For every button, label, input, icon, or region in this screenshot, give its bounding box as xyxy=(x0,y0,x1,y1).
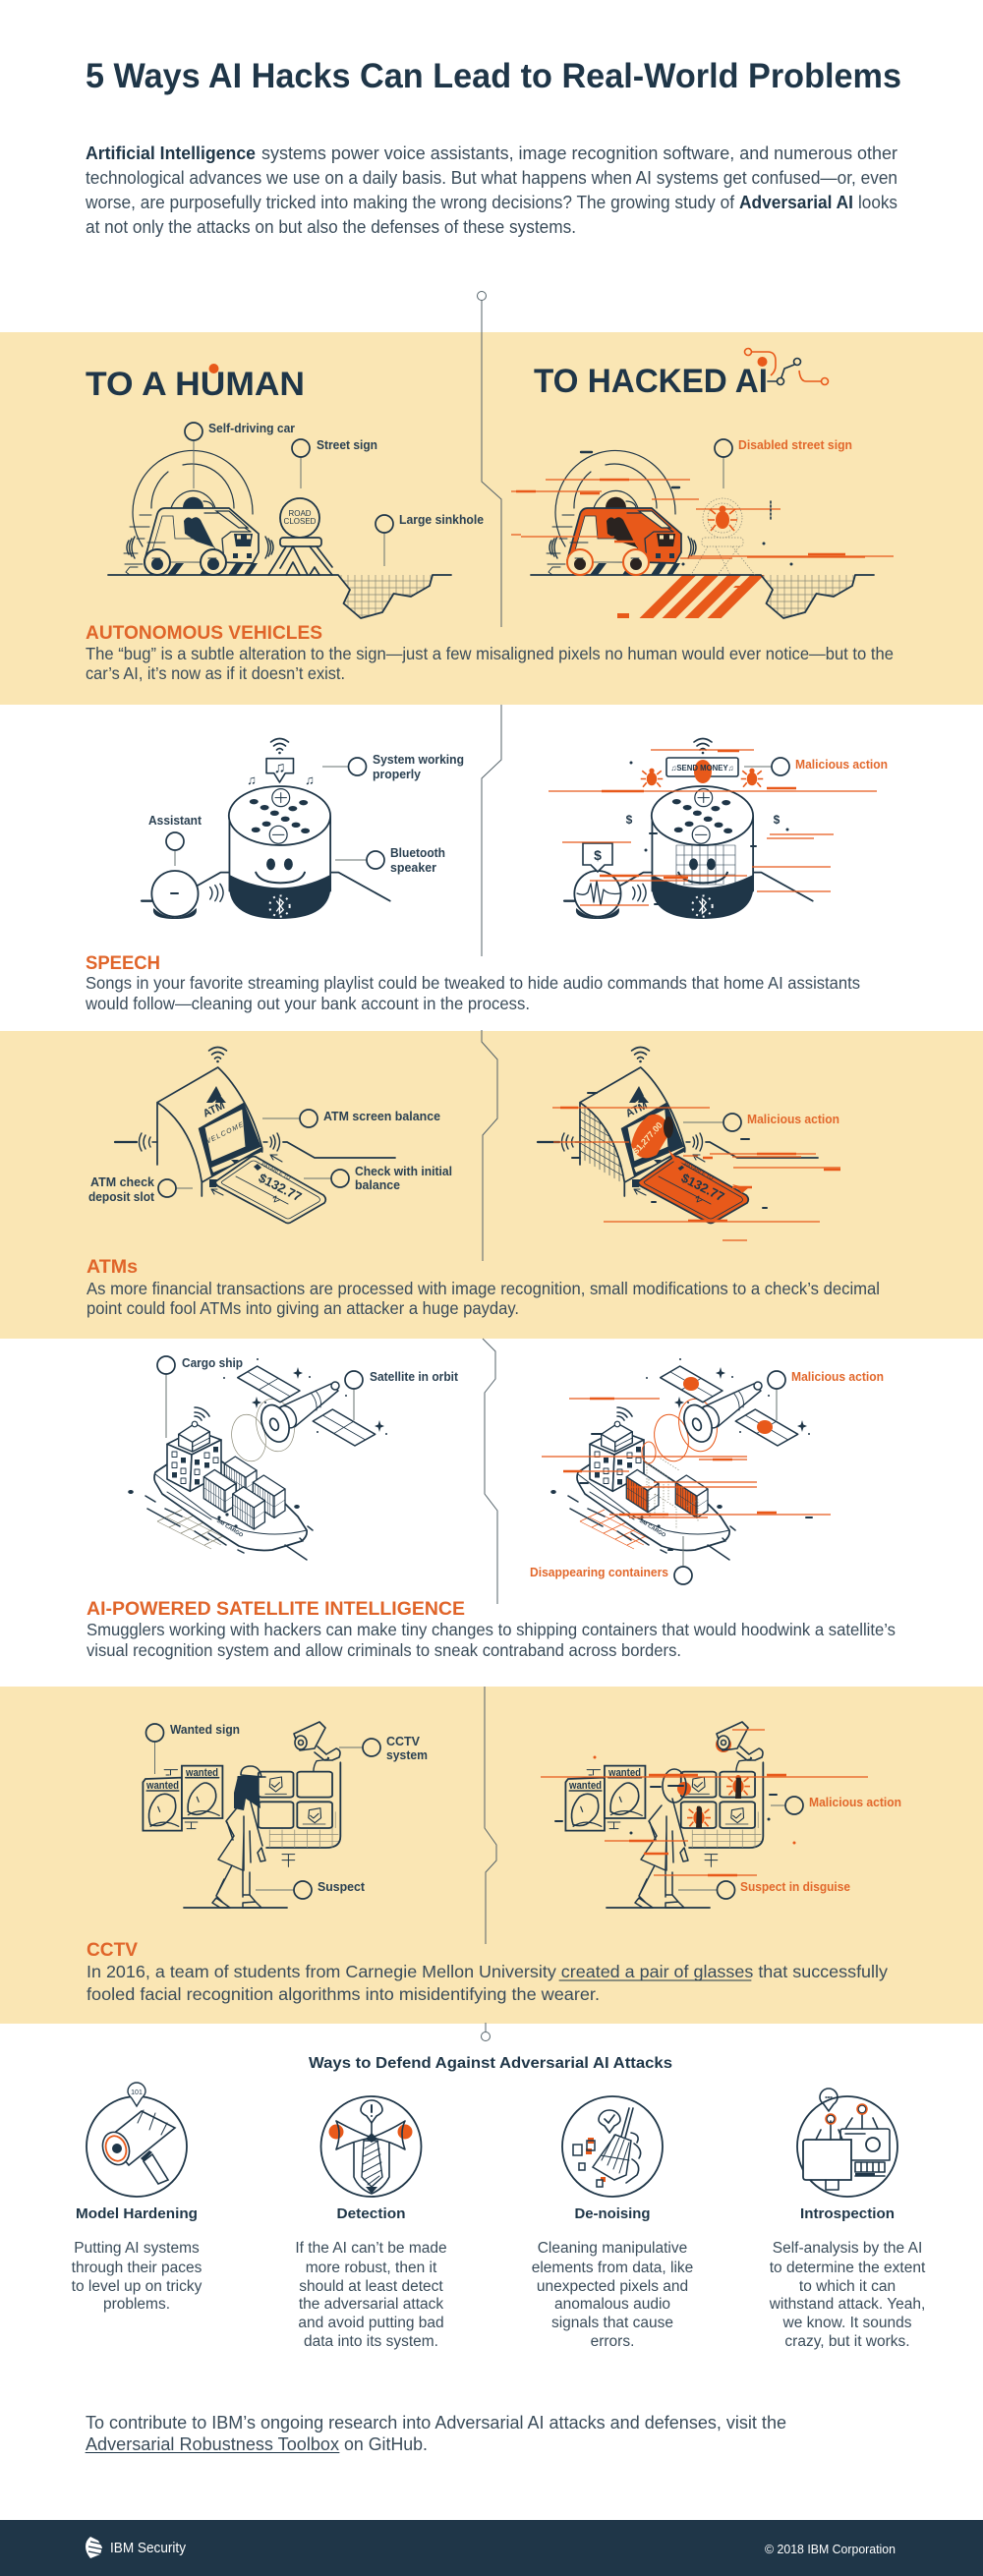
panel text: speech: SPEECH xyxy=(86,953,160,974)
text: withstand attack. Yeah, xyxy=(769,2296,925,2313)
panel text: autonomous vehicles xyxy=(86,623,894,683)
label: ATM check deposit slot xyxy=(88,1174,193,1204)
footer bar: © 2018 IBM Corporation xyxy=(765,2542,896,2556)
illustration: ATM, human view xyxy=(115,1048,395,1223)
closing call to action: on GitHub. xyxy=(344,2434,428,2454)
send money box xyxy=(666,758,738,783)
intro paragraph xyxy=(85,143,897,237)
road closed sign: ROAD xyxy=(288,509,312,518)
text: unexpected pixels and xyxy=(537,2278,688,2295)
footer bar xyxy=(0,2520,983,2576)
panel text: CCTV: CCTV xyxy=(87,1940,138,1961)
illustration: ATM, hacked view: PAYABLE TO xyxy=(682,1162,715,1182)
icon: CCTV camera xyxy=(294,1722,340,1760)
closing call to action: Adversarial Robustness Toolbox xyxy=(86,2434,339,2454)
illustration: cargo ship and satellite, hacked view xyxy=(542,1358,831,1560)
hacked orbits xyxy=(650,1411,693,1464)
text: Putting AI systems xyxy=(74,2240,200,2257)
label: bluetooth speaker: speaker xyxy=(390,860,436,875)
panel text: autonomous vehicles: car’s AI, it’s now as if it doesn’t exist. xyxy=(86,663,345,683)
label: wanted sign: Wanted sign xyxy=(170,1722,240,1737)
illustration: smart speaker, human view: ♫ xyxy=(305,773,315,787)
illustration: self-driving car, hacked view xyxy=(511,450,894,619)
label: suspect in disguise xyxy=(678,1879,850,1899)
bugged monitors xyxy=(726,1775,750,1795)
label: assistant xyxy=(148,813,202,866)
center dividing line xyxy=(478,291,501,2040)
icon: broom xyxy=(562,2096,663,2197)
illustration: CCTV, human view: wanted xyxy=(185,1767,218,1779)
panel text: speech: would follow—cleaning out your bank account in the process. xyxy=(85,994,530,1013)
illustration: ATM, hacked view: $132.77 xyxy=(679,1171,726,1204)
label: CCTV system: system xyxy=(386,1747,428,1762)
illustration: cargo ship and satellite, human view xyxy=(128,1358,387,1560)
panel text: ATMs: As more financial transactions are processed with image recognition, small modifications to a check’s decimal xyxy=(87,1279,880,1298)
intro paragraph: technological advances we use on a daily basis. But what happens when AI systems get confused—or, even xyxy=(86,168,897,188)
water grid xyxy=(157,1510,231,1549)
label: check with initial balance: balance xyxy=(355,1177,400,1192)
panel text: ATMs: ATMs xyxy=(87,1257,138,1278)
hacked panels marks xyxy=(683,1377,773,1434)
defense: introspection: Introspection xyxy=(800,2205,895,2222)
illustration: smart speaker, human view xyxy=(142,739,390,919)
label: malicious action (CCTV): Malicious action xyxy=(809,1795,901,1809)
icon: bug xyxy=(708,505,737,531)
label: CCTV system xyxy=(339,1734,428,1762)
illustration: cargo ship and satellite, hacked view: SM CARGO xyxy=(638,1518,667,1539)
panel text: CCTV xyxy=(87,1940,888,2004)
illustration: ATM, hacked view: ATM xyxy=(624,1100,650,1120)
text: through their paces xyxy=(72,2260,202,2276)
label: system working properly: properly xyxy=(373,767,422,781)
text: and avoid putting bad xyxy=(298,2315,444,2331)
label: cargo ship xyxy=(157,1355,243,1438)
text: crazy, but it works. xyxy=(784,2333,910,2350)
icon: robot xyxy=(797,2089,897,2197)
speaker face grid xyxy=(676,845,735,885)
panel text: ATMs xyxy=(87,1257,880,1318)
person in disguise xyxy=(677,1782,691,1796)
text: should at least detect xyxy=(299,2278,443,2295)
icon: IBM Security logo xyxy=(86,2537,103,2558)
label: large sinkhole: Large sinkhole xyxy=(399,512,484,527)
hacked water grid xyxy=(580,1510,654,1549)
illustration: ATM, hacked view xyxy=(538,1048,840,1240)
illustration: smart speaker, hacked view: $ xyxy=(774,813,781,827)
text: signals that cause xyxy=(551,2315,673,2331)
text: problems. xyxy=(103,2296,170,2313)
label: wanted sign xyxy=(145,1722,240,1774)
illustration: ATM, human view: WELCOME xyxy=(203,1121,246,1147)
ship name: SM CARGO xyxy=(215,1518,245,1539)
label: ATM check deposit slot: deposit slot xyxy=(88,1189,155,1204)
icons: music notes: ♫ xyxy=(273,760,285,776)
intro paragraph: systems power voice assistants, image recognition software, and numerous other xyxy=(261,143,897,163)
glitch lines xyxy=(541,1730,868,1875)
panel text: speech xyxy=(85,953,860,1013)
remaining containers xyxy=(626,1469,708,1517)
panel text: autonomous vehicles: The “bug” is a subtle alteration to the sign—just a few misaligned pixels no human would ever notice—but to the xyxy=(86,644,894,663)
panel text: satellite intelligence xyxy=(87,1599,896,1660)
illustration: ATM, human view: $132.77 xyxy=(257,1171,304,1204)
heading: to hacked AI: TO HACKED AI xyxy=(534,363,768,400)
text: the adversarial attack xyxy=(299,2296,443,2313)
defense: de-noising xyxy=(532,2096,693,2350)
label: cargo ship: Cargo ship xyxy=(182,1355,243,1370)
label: system working properly: System working xyxy=(373,752,464,767)
label: malicious action (speech): Malicious action xyxy=(795,757,888,772)
label: malicious action (satellite) xyxy=(768,1369,884,1420)
icon: wifi xyxy=(694,739,712,754)
ghost containers xyxy=(647,1457,698,1529)
text xyxy=(532,2240,693,2350)
panel text: speech: Songs in your favorite streaming playlist could be tweaked to hide audio commands that home AI assistants xyxy=(86,973,860,993)
assistant waveform xyxy=(577,881,620,905)
intro paragraph: at not only the attacks on but also the defenses of these systems. xyxy=(86,217,576,237)
dollar bubble: $ xyxy=(594,847,602,863)
icon: circuit traces xyxy=(745,348,828,385)
text: errors. xyxy=(591,2333,634,2350)
label: disappearing containers xyxy=(530,1536,692,1584)
illustration: smart speaker, human view: ♫ xyxy=(247,773,257,787)
panel text: CCTV: In 2016, a team of students from Carnegie Mellon University created a pair of glasses that successfully xyxy=(87,1962,888,1981)
icon: wifi xyxy=(271,739,289,754)
label: disabled street sign xyxy=(715,437,852,488)
text: elements from data, like xyxy=(532,2260,693,2276)
illustration: smart speaker, hacked view xyxy=(549,739,877,919)
label: street sign xyxy=(292,437,377,488)
intro paragraph: looks xyxy=(858,193,897,212)
illustration: smart speaker, hacked view: $ xyxy=(626,813,633,827)
illustration: self-driving car, human view xyxy=(108,450,451,619)
containers xyxy=(224,1457,257,1499)
label: bluetooth speaker: Bluetooth xyxy=(390,845,445,860)
panel text: CCTV: fooled facial recognition algorithms into misidentifying the wearer. xyxy=(87,1984,600,2004)
defense: de-noising: De-noising xyxy=(574,2205,651,2222)
label: disappearing containers: Disappearing containers xyxy=(530,1565,668,1579)
label: satellite in orbit: Satellite in orbit xyxy=(370,1369,459,1384)
text xyxy=(72,2240,202,2313)
hacked screen blob xyxy=(631,1115,671,1158)
send money box: ♫SEND MONEY♫ xyxy=(670,764,733,773)
label: bluetooth speaker xyxy=(335,845,445,875)
defense: model hardening: Model Hardening xyxy=(76,2205,198,2222)
label: check with initial balance xyxy=(304,1164,452,1192)
text: to determine the extent xyxy=(770,2260,926,2276)
label: assistant: Assistant xyxy=(148,813,202,828)
person xyxy=(184,1766,287,1908)
panel text: satellite intelligence: Smugglers working with hackers can make tiny changes to shipping containers that would hoodwink a satellite’s xyxy=(87,1620,896,1639)
intro paragraph: worse, are purposefully tricked into making the wrong decisions? The growing study of xyxy=(85,193,735,212)
panel text: satellite intelligence: visual recognition system and allow criminals to sneak contraband across borders. xyxy=(87,1640,681,1660)
text: we know. It sounds xyxy=(782,2315,912,2331)
label: ATM screen balance: ATM screen balance xyxy=(323,1109,440,1123)
icon: roller xyxy=(87,2083,187,2197)
label: malicious action (ATM): Malicious action xyxy=(747,1112,839,1126)
text: anomalous audio xyxy=(554,2296,670,2313)
hacked ground stripes xyxy=(617,575,765,618)
label: malicious action (ATM) xyxy=(683,1112,839,1131)
glitch lines xyxy=(542,1399,831,1517)
text: more robust, then it xyxy=(306,2260,437,2276)
closing call to action: To contribute to IBM’s ongoing research into Adversarial AI attacks and defenses, visit the xyxy=(86,2413,786,2433)
icon: wifi xyxy=(208,1048,226,1062)
illustration: CCTV, hacked view: wanted xyxy=(607,1767,641,1779)
intro paragraph: Artificial Intelligence xyxy=(86,143,256,163)
cream band backgrounds xyxy=(0,332,983,2024)
text: Cleaning manipulative xyxy=(538,2240,687,2257)
icon: roller: 101 xyxy=(131,2089,143,2096)
heading: to hacked AI xyxy=(534,348,828,400)
text: to level up on tricky xyxy=(72,2278,202,2295)
illustration: ATM, human view: PAYABLE TO xyxy=(260,1162,292,1182)
text: Self-analysis by the AI xyxy=(773,2240,922,2257)
label: large sinkhole xyxy=(376,512,484,566)
label: self-driving car xyxy=(185,421,295,488)
bugs xyxy=(641,769,663,787)
label: suspect xyxy=(256,1879,366,1899)
panel text: ATMs: point could fool ATMs into giving an attacker a huge payday. xyxy=(87,1298,519,1318)
glitch lines xyxy=(552,1108,840,1240)
heading: to a human: TO A HUMAN xyxy=(86,366,305,403)
defense: detection: Detection xyxy=(336,2205,405,2222)
label: system working properly xyxy=(322,752,464,781)
defense: model hardening xyxy=(72,2083,202,2313)
label: suspect: Suspect xyxy=(318,1879,366,1894)
road closed sign: CLOSED xyxy=(284,517,317,526)
intro paragraph: Adversarial AI xyxy=(739,193,853,212)
footer bar: IBM Security xyxy=(110,2540,186,2556)
closing call to action xyxy=(86,2413,786,2454)
illustration: CCTV, hacked view: wanted xyxy=(568,1780,602,1792)
text xyxy=(295,2240,447,2350)
text: data into its system. xyxy=(304,2333,438,2350)
label: disabled street sign: Disabled street sign xyxy=(738,437,852,452)
label: CCTV system: CCTV xyxy=(386,1734,420,1748)
label: suspect in disguise: Suspect in disguise xyxy=(740,1879,850,1894)
icon: wifi xyxy=(631,1048,649,1062)
label: satellite in orbit xyxy=(345,1369,459,1420)
illustration: ATM, hacked view: $1,277.00 xyxy=(631,1120,665,1156)
glitch lines xyxy=(549,750,877,905)
title: 5 Ways AI Hacks Can Lead to Real-World Problems xyxy=(86,57,901,95)
panel text: autonomous vehicles: AUTONOMOUS VEHICLES xyxy=(86,623,322,644)
panel text: satellite intelligence: AI-POWERED SATELLITE INTELLIGENCE xyxy=(87,1599,465,1620)
illustration: CCTV, human view xyxy=(143,1722,340,1908)
illustration: ATM, human view: ATM xyxy=(202,1100,227,1120)
text: to which it can xyxy=(799,2278,896,2295)
wanted poster text: wanted xyxy=(145,1780,179,1792)
label: street sign: Street sign xyxy=(317,437,377,452)
defense: introspection xyxy=(769,2089,926,2350)
glitch lines xyxy=(511,480,894,558)
label: ATM check deposit slot: ATM check xyxy=(90,1174,155,1189)
icon: megaphones xyxy=(320,2096,421,2197)
label: malicious action (speech) xyxy=(744,757,888,775)
label: malicious action (CCTV) xyxy=(771,1795,901,1814)
label: ATM screen balance xyxy=(262,1109,440,1127)
label: malicious action (satellite): Malicious action xyxy=(791,1369,884,1384)
label: check with initial balance: Check with initial xyxy=(355,1164,452,1178)
glitched road sign xyxy=(691,498,755,575)
text xyxy=(769,2240,926,2350)
grid on hacked ATM side xyxy=(580,1107,623,1181)
icon: hacked CCTV camera xyxy=(716,1722,763,1760)
orbits xyxy=(227,1411,270,1464)
defense: detection xyxy=(295,2096,447,2350)
heading: defenses: Ways to Defend Against Adversarial AI Attacks xyxy=(309,2055,672,2072)
text: If the AI can’t be made xyxy=(295,2240,447,2257)
illustration: CCTV, hacked view xyxy=(541,1722,868,1908)
label: self-driving car: Self-driving car xyxy=(208,421,295,435)
road closed sign xyxy=(268,498,332,575)
dollar bubble xyxy=(583,843,612,872)
